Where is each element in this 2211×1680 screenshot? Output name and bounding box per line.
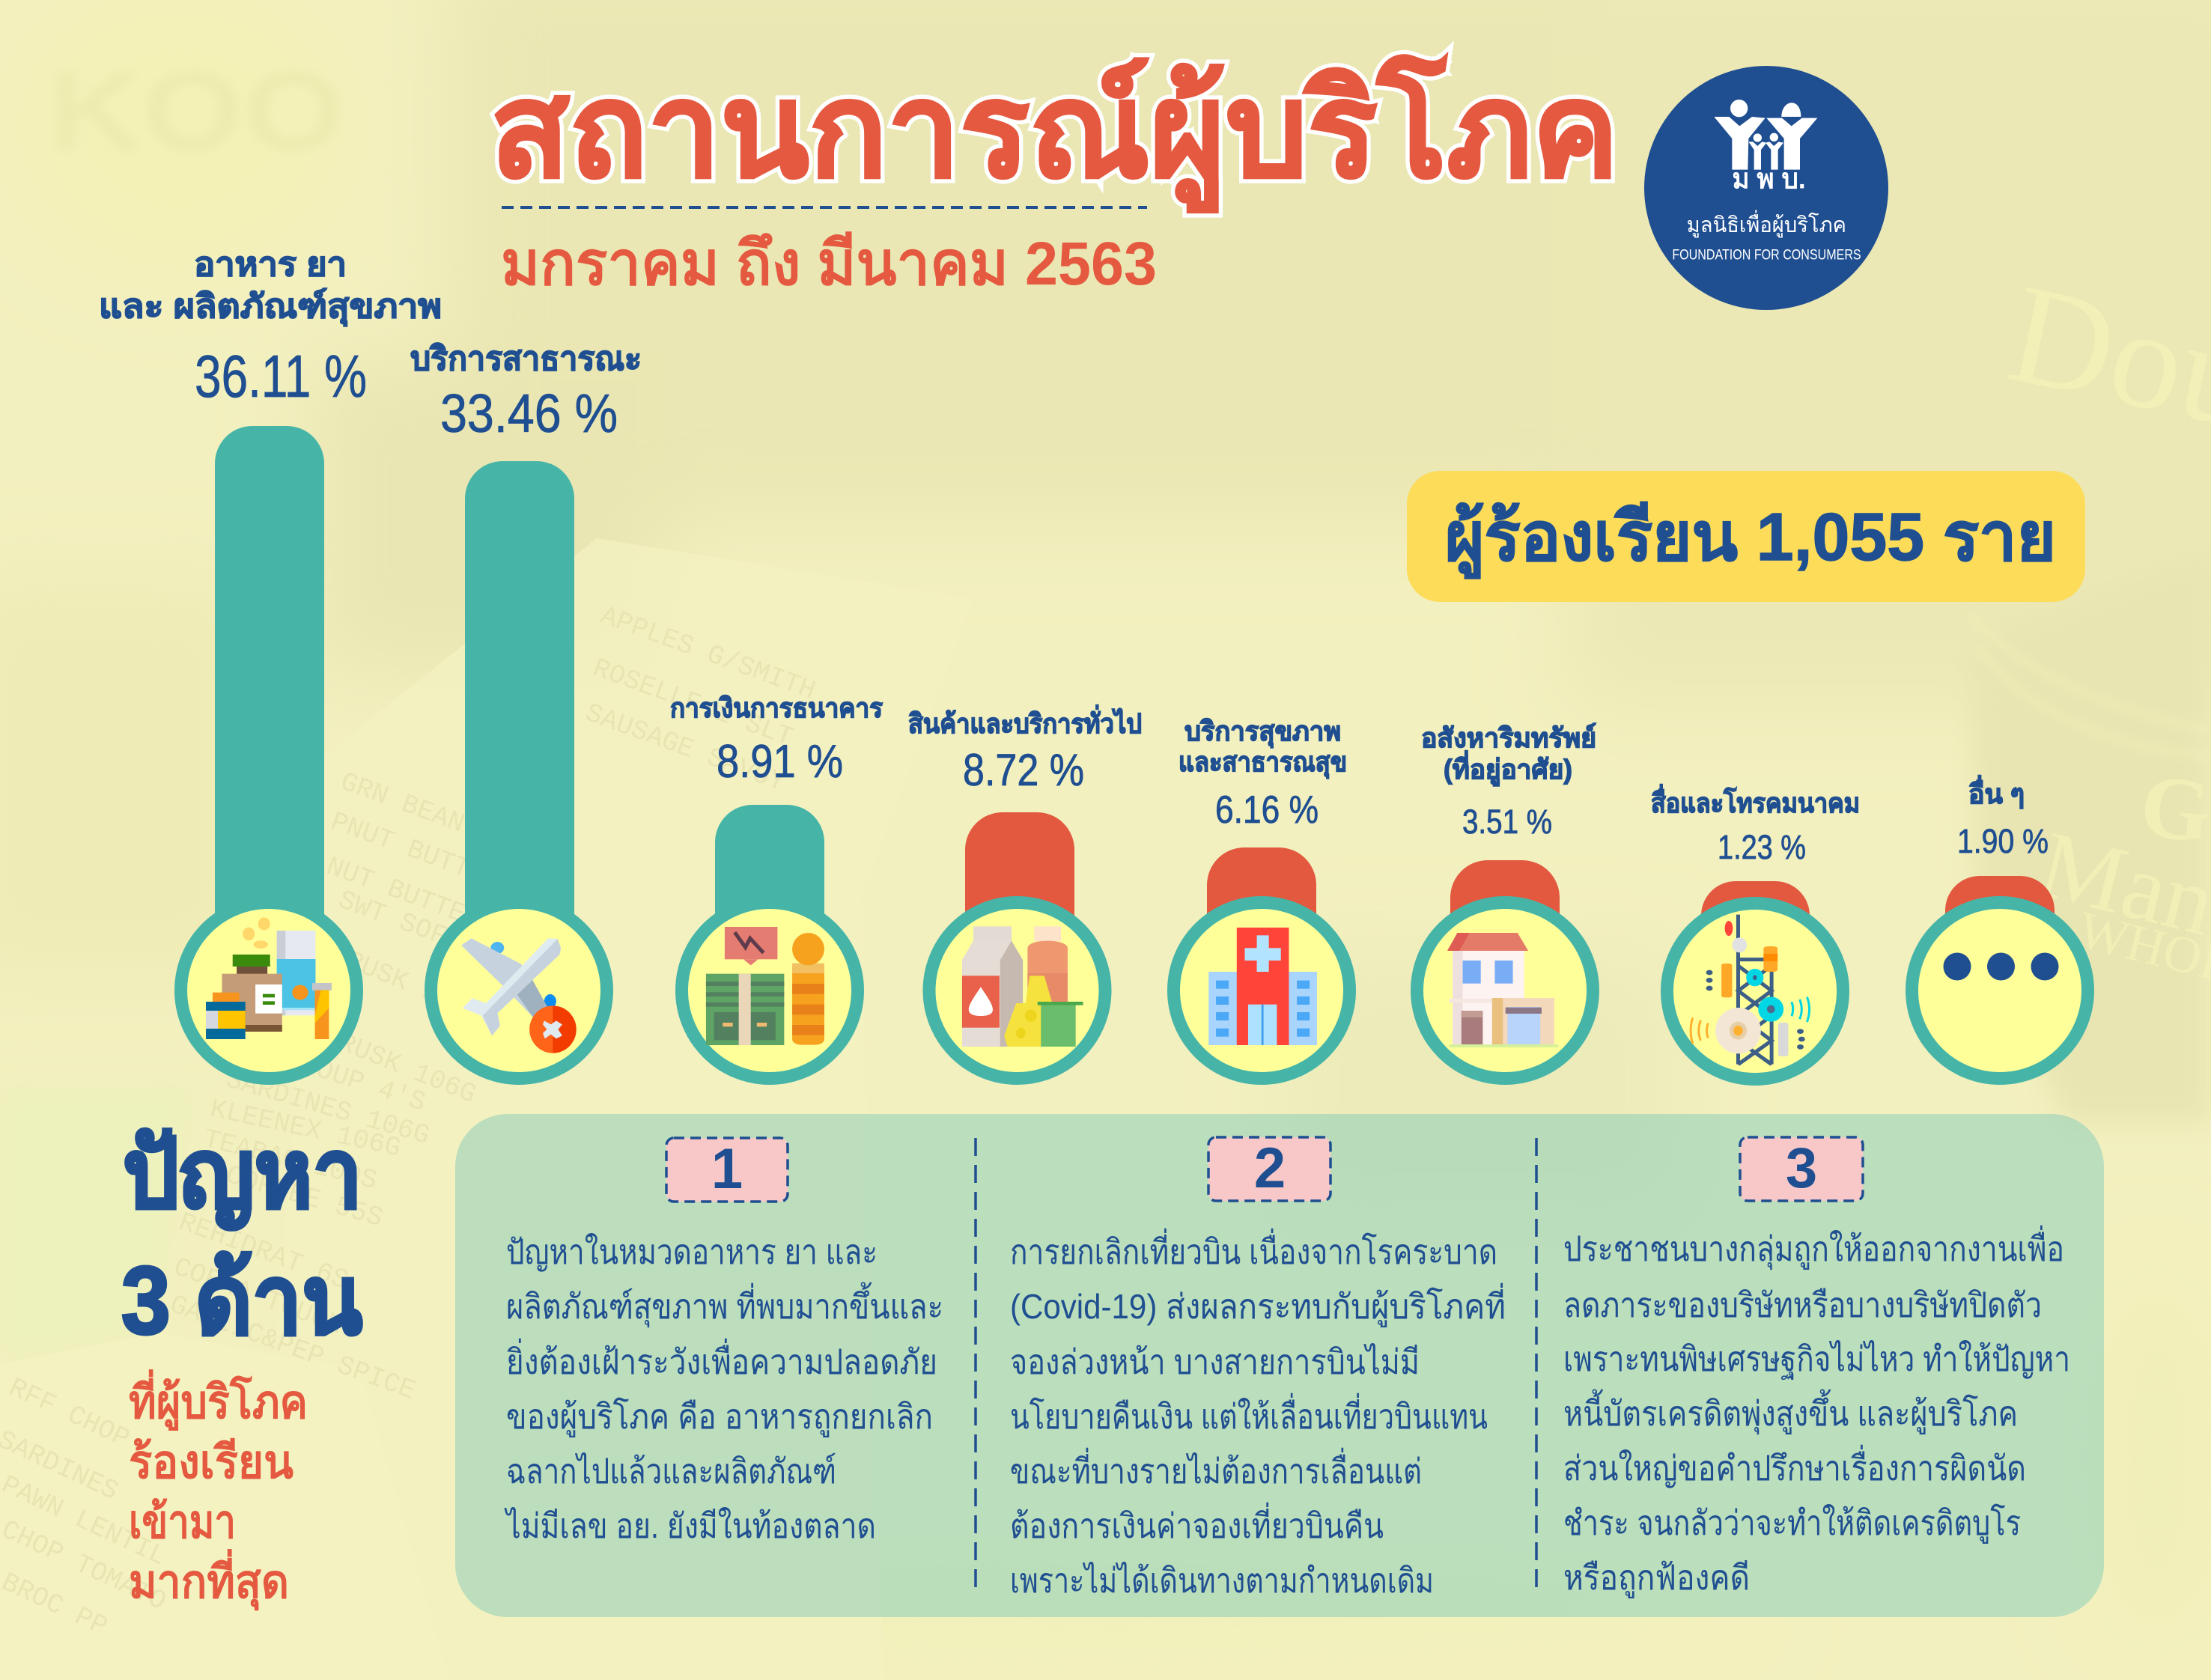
can lettering: KOO — [48, 48, 344, 174]
label: real estate — [1421, 722, 1596, 787]
icon: food and medicine bottles — [206, 917, 332, 1039]
number badge 3: 3 — [1786, 1136, 1817, 1200]
complainant count panel — [1407, 471, 2085, 602]
background: faded photo of receipts and cans: SARDINES 106G — [222, 1064, 433, 1151]
background: faded photo of receipts and cans: REHIDRAT 6S — [174, 1207, 353, 1297]
logo: Foundation for Consumers — [1644, 66, 1888, 310]
icon: telecom tower — [1691, 915, 1810, 1065]
background: faded photo of receipts and cans: NUT BUTTER — [322, 851, 484, 935]
label: public services: บริการสาธารณะ — [410, 341, 642, 377]
value 3.51 %: 3.51 % — [1462, 803, 1552, 841]
bar: food and drugs — [215, 426, 324, 928]
background: faded photo of receipts and cans: RFF CHOP — [4, 1372, 134, 1455]
heading: 3 problem areas: 3 ด้าน — [121, 1247, 362, 1354]
value 1.23 %: 1.23 % — [1718, 828, 1806, 866]
column dividers — [976, 1138, 1536, 1596]
number badge 2: 2 — [1254, 1136, 1286, 1200]
value 8.72 %: 8.72 % — [963, 745, 1084, 795]
value 8.91 %: 8.91 % — [717, 736, 843, 788]
bar chart: complaints by category — [215, 426, 2055, 928]
number badge 1: 1 — [711, 1137, 743, 1201]
number badge 2 — [1208, 1136, 1330, 1201]
problem 3 text: ชำระ จนกลัวว่าจะทำให้ติดเครดิตบูโร — [1563, 1503, 2021, 1544]
label: real estate: (ที่อยู่อาศัย) — [1444, 750, 1572, 787]
problem 1 text: ผลิตภัณฑ์สุขภาพ ที่พบมากขึ้นและ — [506, 1282, 943, 1328]
problem 1 text — [504, 1232, 943, 1545]
title: สถานการณ์ผู้บริโภค — [490, 54, 1619, 213]
problem 3 text: ประชาชนบางกลุ่มถูกให้ออกจากงานเพื่อ — [1563, 1225, 2064, 1270]
label: food, drugs and health products — [99, 246, 442, 327]
background: faded photo of receipts and cans: COFFEE 55S — [222, 1160, 386, 1234]
value 36.11 %: 36.11 % — [195, 343, 367, 410]
problem 1 text: ฉลากไปแล้วและผลิตภัณฑ์ — [506, 1452, 836, 1491]
value 1.90 %: 1.90 % — [1957, 822, 2049, 860]
bar: goods and services — [965, 812, 1074, 928]
heading: 3 problem areas — [121, 1121, 362, 1354]
logo: Foundation for Consumers: FOUNDATION FOR CONSUMERS — [1672, 248, 1861, 264]
label: finance and banking: การเงินการธนาคาร — [670, 693, 884, 723]
label: media and telecom: สื่อและโทรคมนาคม — [1651, 784, 1860, 818]
icon: cancelled flight plane — [461, 938, 577, 1053]
problem 1 text: ของผู้บริโภค คือ อาหารถูกยกเลิก — [506, 1397, 933, 1437]
label: others: อื่น ๆ — [1968, 775, 2025, 809]
panel: three problems — [455, 1114, 2104, 1617]
complainant count panel: ผู้ร้องเรียน 1,055 ราย — [1445, 500, 2056, 579]
problem 3 text: เพราะทนพิษเศรษฐกิจไม่ไหว ทำให้ปัญหา — [1563, 1339, 2070, 1380]
title: สถานการณ์ผู้บริโภค — [490, 54, 1619, 213]
labels and percentages — [99, 246, 2049, 866]
background: faded photo of receipts and cans: TEABAG 100S — [200, 1124, 380, 1196]
background: faded photo of receipts and cans: GRN BEAN — [336, 767, 469, 839]
subheading: most complained — [129, 1369, 308, 1610]
label: food, drugs and health products: และ ผลิตภัณฑ์สุขภาพ — [99, 287, 442, 327]
problem 2 text: จองล่วงหน้า บางสายการบินไม่มี — [1010, 1342, 1420, 1381]
problem 3 text: หนี้บัตรเครดิตพุ่งสูงขึ้น และผู้บริโภค — [1563, 1389, 2018, 1435]
value 6.16 %: 6.16 % — [1215, 788, 1319, 832]
logo: Foundation for Consumers: ม พ บ. — [1732, 163, 1806, 195]
icon: hospital building — [1208, 928, 1317, 1045]
problem 2 text: นโยบายคืนเงิน แต่ให้เลื่อนเที่ยวบินแทน — [1010, 1393, 1488, 1436]
subheading: most complained: ที่ผู้บริโภค — [129, 1369, 308, 1431]
icon: finance money and coins — [706, 927, 824, 1045]
problem 2 text: ต้องการเงินค่าจองเที่ยวบินคืน — [1010, 1502, 1384, 1545]
problem 3 text: ลดภาระของบริษัทหรือบางบริษัทปิดตัว — [1563, 1285, 2042, 1324]
subtitle date range: มกราคม ถึง มีนาคม 2563 — [501, 230, 1157, 298]
number badge 3 — [1740, 1136, 1863, 1201]
problem 2 text — [1010, 1228, 1506, 1600]
bar: finance and banking — [715, 805, 824, 928]
background: faded photo of receipts and cans: GARLIC&PEP SPICE — [165, 1289, 419, 1407]
problem 3 text: หรือถูกฟ้องคดี — [1563, 1558, 1750, 1598]
problem 1 text: ไม่มีเลข อย. ยังมีในท้องตลาด — [504, 1506, 876, 1545]
problem 2 text: การยกเลิกเที่ยวบิน เนื่องจากโรคระบาด — [1010, 1228, 1497, 1271]
background: faded photo of receipts and cans: ROSELLE 1 SLT — [589, 653, 797, 753]
bar: others — [1945, 876, 2055, 928]
label: food, drugs and health products: อาหาร ยา — [194, 246, 347, 283]
background: faded photo of receipts and cans: RUSK 180G — [341, 945, 488, 1028]
bar: health — [1207, 847, 1316, 928]
problem 1 text: ยิ่งต้องเฝ้าระวังเพื่อความปลอดภัย — [506, 1338, 937, 1381]
icon: three dots — [1944, 952, 2059, 981]
problem 1 text: ปัญหาในหมวดอาหาร ยา และ — [506, 1232, 878, 1271]
problem 2 text: (Covid-19) ส่งผลกระทบกับผู้บริโภคที่ — [1010, 1282, 1506, 1327]
label: health and public health: บริการสุขภาพ — [1184, 716, 1341, 749]
label: general goods and services: สินค้าและบริการทั่วไป — [908, 704, 1142, 739]
background: faded photo of receipts and cans: PNUT BUTTER — [326, 806, 505, 896]
title dashed divider — [502, 206, 1147, 209]
value 33.46 %: 33.46 % — [440, 384, 618, 444]
can at right — [1971, 554, 2211, 1123]
label: real estate: อสังหาริมทรัพย์ — [1421, 722, 1596, 753]
icon: milk carton, bottle and cheese — [962, 926, 1083, 1047]
subheading: most complained: มากที่สุด — [129, 1549, 289, 1610]
problem 3 text — [1563, 1225, 2070, 1598]
background: faded photo of receipts and cans: CHOP TOMATO — [0, 1515, 171, 1617]
receipts — [247, 538, 973, 1680]
problem 3 text: ส่วนใหญ่ขอคำปรึกษาเรื่องการผิดนัด — [1563, 1444, 2026, 1488]
number badge 1 — [666, 1137, 788, 1202]
green tinted card lower left — [0, 1086, 195, 1364]
background: faded photo of receipts and cans: SWT SOFT — [334, 885, 466, 958]
problem 2 text: เพราะไม่ได้เดินทางตามกำหนดเดิม — [1010, 1561, 1434, 1600]
icon: house and shop — [1447, 933, 1558, 1047]
logo: Foundation for Consumers: มูลนิธิเพื่อผู้บริโภค — [1687, 210, 1846, 238]
bar: real estate — [1450, 860, 1560, 928]
label: health and public health: และสาธารณสุข — [1179, 746, 1347, 779]
bar: public services — [465, 461, 574, 928]
subheading: most complained: ร้องเรียน — [129, 1437, 294, 1488]
background: faded photo of receipts and cans: COBRA TOUCH — [169, 1252, 347, 1342]
bar: media and telecom — [1701, 881, 1810, 928]
background: faded photo of receipts and cans: SOUP 4'S — [297, 1049, 430, 1119]
background: faded photo of receipts and cans: APPLES G/SMITH — [596, 600, 819, 707]
background: faded photo of receipts and cans: RUSK 106G — [334, 1027, 481, 1110]
background: faded photo of receipts and cans: SAUSAGE SAVOY — [581, 698, 789, 798]
subheading: most complained: เข้ามา — [129, 1497, 236, 1548]
icon circles — [181, 903, 2087, 1080]
problem 2 text: ขณะที่บางรายไม่ต้องการเลื่อนแต่ — [1010, 1447, 1422, 1491]
label: health and public health — [1179, 716, 1347, 779]
background: faded photo of receipts and cans: PAWN LENTIL — [0, 1470, 171, 1572]
background: faded photo of receipts and cans: KLEENEX 106G — [207, 1094, 404, 1164]
heading: 3 problem areas: ปัญหา — [123, 1121, 362, 1231]
